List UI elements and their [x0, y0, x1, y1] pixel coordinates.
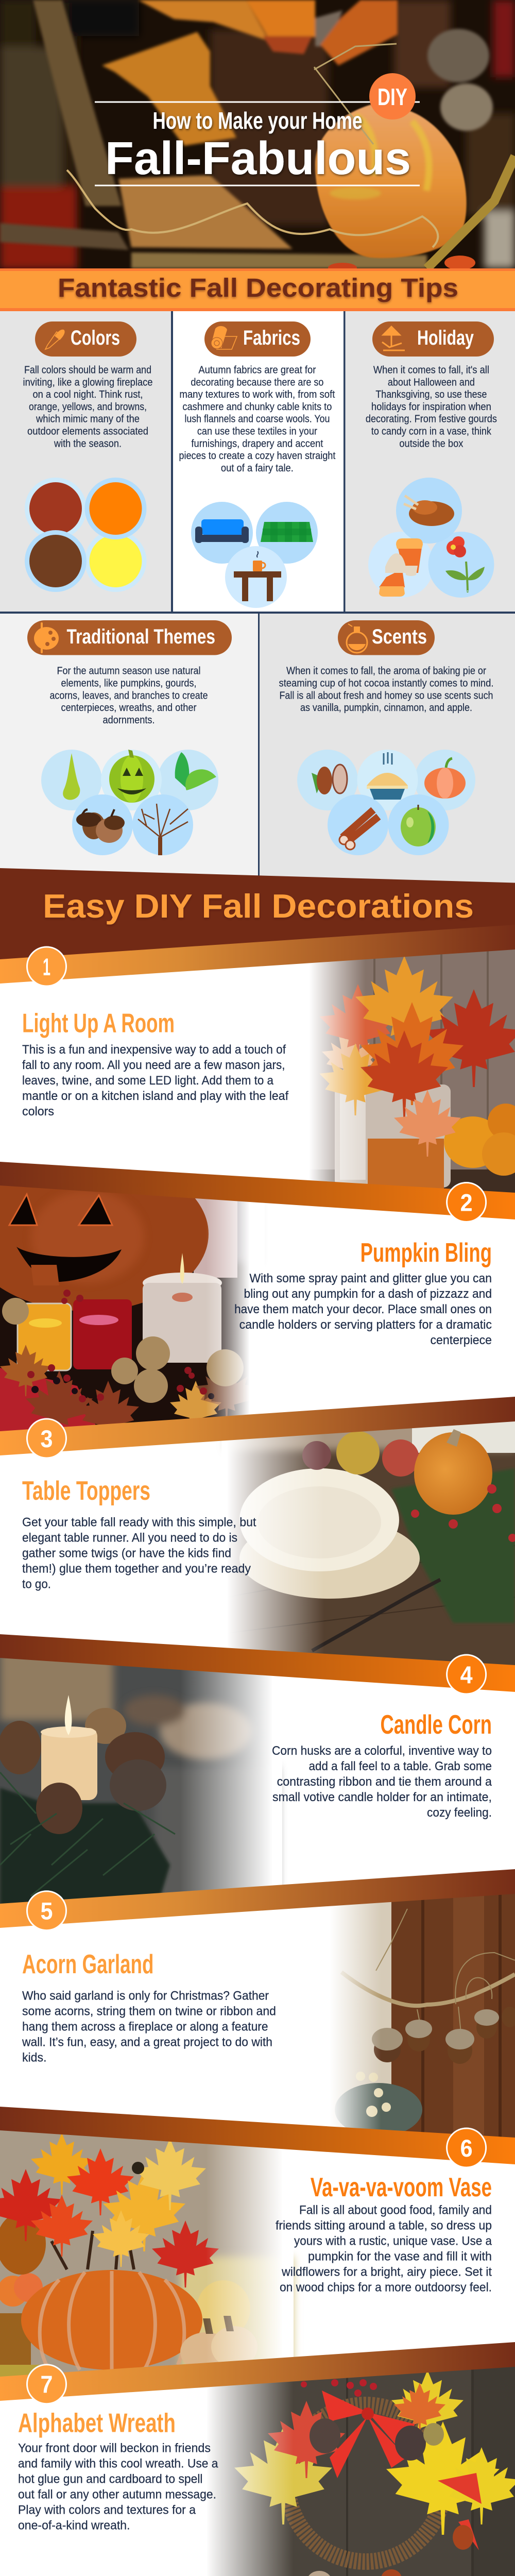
text: light up a room: colors: [22, 1105, 54, 1118]
text: scents: as vanilla, pumpkin, cinnamon, and apple.: [300, 702, 472, 714]
text: colors: inviting, like a glowing fireplace: [23, 377, 152, 388]
text: candle corn: cozy feeling.: [427, 1806, 492, 1820]
text: holiday: about Halloween and: [388, 377, 475, 388]
band and badge 2: 2: [460, 1189, 473, 1216]
text: light up a room: Light Up A Room: [22, 1008, 175, 1038]
text: acorn garland: Acorn Garland: [22, 1950, 153, 1979]
text: table toppers: gather some twigs (or have the kids find: [22, 1547, 231, 1561]
text: alphabet wreath: one-of-a-kind wreath.: [18, 2519, 130, 2533]
text: acorn garland: kids.: [22, 2050, 46, 2065]
hero title block: [95, 73, 420, 187]
text: candle corn: Corn husks are a colorful, inventive way to: [272, 1744, 492, 1758]
text: alphabet wreath: hot glue gun and cardboard to spell: [18, 2472, 203, 2486]
text: holiday: decorating. From festive gourds: [366, 414, 497, 425]
section header: easy DIY fall decorations: [0, 868, 515, 963]
icons: sofa, rug, table: [191, 502, 318, 608]
band and badge 2: [0, 1162, 515, 1222]
text: table toppers: to go.: [22, 1578, 51, 1591]
title line 2: Fall-Fabulous: [105, 133, 411, 184]
DIY badge: [369, 73, 416, 120]
text: colors: with the season.: [54, 438, 122, 449]
text: colors: Fall colors should be warm and: [24, 365, 151, 376]
icon: dropper: [45, 330, 65, 349]
text: holiday: When it comes to fall, it's all: [373, 365, 489, 376]
icons: turkey, candy corn, flower: [368, 478, 494, 598]
text: fabrics: furnishings, drapery and accent: [191, 438, 323, 449]
text: scents: steaming cup of hot cocoa instantly comes to mind.: [279, 678, 493, 689]
text: pumpkin bling: candle holders or serving platters for a dramatic: [239, 1318, 492, 1332]
text: fabrics: many textures to work with, from soft: [179, 389, 335, 400]
text: va-va-va-voom vase: on wood chips for a more outdoorsy feel.: [280, 2281, 492, 2295]
text: holiday: Thanksgiving, so use these: [375, 389, 487, 400]
text: va-va-va-voom vase: yours with a rustic, unique vase. Use a: [294, 2234, 492, 2248]
text: acorn garland: some acorns, string them on twine or ribbon and: [22, 2004, 276, 2019]
text: fabrics: [179, 365, 336, 474]
color swatches: [25, 478, 146, 592]
pill: colors: Colors: [71, 327, 120, 349]
text: alphabet wreath: Play with colors and textures for a: [18, 2503, 196, 2517]
photo 2: glitter pumpkin with candles: [0, 1185, 248, 1431]
text: light up a room: mantle or on a kitchen island and play with the leaf: [22, 1089, 288, 1103]
icons: cocoa, pie, pumpkin, cinnamon, apple: [297, 750, 475, 855]
band and badge 4: [0, 1634, 515, 1694]
band and badge 3: [0, 1397, 515, 1458]
text: va-va-va-voom vase: wildflowers for a bright, airy piece. Set it: [281, 2265, 492, 2279]
photo 4: pillar candle with pine cones: [0, 1658, 284, 1904]
text: fabrics: Autumn fabrics are great for: [198, 365, 316, 376]
text: colors: [23, 365, 152, 449]
band and badge 5: 5: [40, 1897, 53, 1925]
text: colors: outdoor elements associated: [27, 426, 148, 437]
text: scents: [279, 666, 493, 714]
photo 7: autumn wreath on dark wood: [210, 2367, 515, 2576]
text: va-va-va-voom vase: Fall is all about good food, family and: [299, 2204, 492, 2217]
panel: holiday: [345, 311, 515, 612]
text: va-va-va-voom vase: [276, 2173, 492, 2295]
text: light up a room: [22, 1008, 288, 1118]
text: candle corn: add a fall feel to a table. Grab some: [309, 1759, 492, 1773]
text: pumpkin bling: With some spray paint and glitter glue you can: [249, 1272, 492, 1285]
pill: scents: [338, 620, 435, 655]
text: acorn garland: hang them across a fireplace or along a feature: [22, 2020, 268, 2034]
panel: traditional themes: [0, 614, 258, 882]
text: fabrics: lush flannels and coarse wools. You: [184, 414, 330, 425]
text: candle corn: [272, 1710, 492, 1820]
DIY badge: DIY: [377, 83, 407, 110]
text: fabrics: decorating because there are so: [191, 377, 323, 388]
text: va-va-va-voom vase: pumpkin for the vase and fill it with: [308, 2250, 492, 2264]
text: colors: which mimic many of the: [36, 414, 140, 425]
band and badge 1: 1: [43, 953, 50, 980]
pill: colors: [35, 321, 136, 357]
band and badge 4: 4: [460, 1661, 473, 1688]
text: fabrics: cashmere and chunky cable knits to: [182, 401, 332, 413]
band and badge 6: [0, 2107, 515, 2167]
photo 5: acorn garland on wood wall: [335, 1894, 515, 2138]
band and badge 7: [0, 2342, 515, 2404]
text: alphabet wreath: and family with this cool wreath. Use a: [18, 2457, 218, 2471]
text: pumpkin bling: centerpiece: [431, 1333, 492, 1347]
icons: gourd, jack-o-lantern, leaves, acorns, branches: [41, 750, 218, 855]
text: holiday: [366, 365, 497, 449]
text: acorn garland: wall. It’s fun, easy, and a great project to do with: [22, 2035, 272, 2049]
text: traditional themes: For the autumn season use natural: [57, 666, 201, 677]
icon: perfume bottle: [347, 624, 367, 653]
band and badge 7: 7: [40, 2371, 53, 2398]
text: alphabet wreath: Your front door will beckon in friends: [18, 2442, 211, 2455]
text: table toppers: [22, 1476, 256, 1591]
text: colors: on a cool night. Think rust,: [33, 389, 143, 400]
title line 1: How to Make your Home: [152, 107, 363, 134]
pill: traditional themes: Traditional Themes: [67, 625, 215, 648]
section header: easy DIY fall decorations: Easy DIY Fall Decorations: [43, 887, 474, 925]
pill: holiday: Holiday: [417, 327, 474, 349]
text: candle corn: small votive candle holder for an intimate,: [272, 1790, 492, 1804]
text: table toppers: Get your table fall ready with this simple, but: [22, 1516, 256, 1530]
text: pumpkin bling: [234, 1238, 492, 1347]
text: traditional themes: centerpieces, wreaths, and other: [61, 702, 197, 714]
icon: palette: [34, 622, 59, 653]
text: acorn garland: Who said garland is only for Christmas? Gather: [22, 1989, 269, 2003]
text: traditional themes: elements, like pumpkins, gourds,: [61, 678, 197, 689]
pill: fabrics: [204, 321, 311, 357]
panel: colors: [0, 311, 171, 612]
text: va-va-va-voom vase: friends sitting around a table, so dress up: [276, 2219, 492, 2233]
text: traditional themes: acorns, leaves, and branches to create: [49, 690, 208, 701]
text: table toppers: Table Toppers: [22, 1476, 150, 1506]
band and badge 6: 6: [460, 2134, 473, 2162]
photo 6: pumpkin vase with flowers: [0, 2112, 294, 2391]
text: fabrics: out of a fairy tale.: [221, 463, 294, 474]
icon: fabric roll: [211, 326, 237, 349]
text: pumpkin bling: bling out any pumpkin for a dash of pizzazz and: [244, 1287, 492, 1301]
band: fantastic fall decorating tips: [0, 268, 515, 311]
text: light up a room: leaves, twine, and some LED light. Add them to a: [22, 1074, 274, 1088]
hero photo: pumpkin and autumn arrangement: [0, 0, 515, 273]
text: candle corn: contrasting ribbon and tie them around a: [277, 1775, 492, 1789]
text: holiday: holidays for inspiration when: [371, 401, 491, 413]
text: holiday: outside the box: [399, 438, 463, 449]
panel: scents: [260, 614, 515, 884]
text: alphabet wreath: [18, 2409, 218, 2533]
text: light up a room: This is a fun and inexpensive way to add a touch of: [22, 1043, 286, 1057]
text: scents: Fall is all about fresh and homey so use scents such: [279, 690, 493, 701]
text: pumpkin bling: have them match your decor. Place small ones on: [234, 1302, 492, 1316]
text: colors: orange, yellows, and browns,: [29, 401, 147, 413]
text: table toppers: elegant table runner. All you need to do is: [22, 1531, 237, 1545]
panel: fabrics: [173, 311, 344, 612]
pill: traditional themes: [27, 620, 232, 655]
pill: scents: Scents: [372, 625, 427, 648]
icon: beach lounger: [382, 327, 405, 350]
band and badge 3: 3: [40, 1425, 53, 1452]
text: acorn garland: [22, 1950, 276, 2065]
band and badge 1: [0, 925, 515, 986]
panel dividers: [0, 311, 515, 614]
text: alphabet wreath: Alphabet Wreath: [18, 2409, 176, 2438]
text: fabrics: pieces to create a cozy haven straight: [179, 450, 336, 462]
text: traditional themes: [49, 666, 208, 726]
pill: holiday: [372, 321, 494, 357]
text: holiday: to candy corn in a vase, think: [371, 426, 492, 437]
text: light up a room: fall to any room. All you need are a few mason jars,: [22, 1058, 285, 1072]
text: traditional themes: adornments.: [103, 715, 154, 726]
text: scents: When it comes to fall, the aroma of baking pie or: [286, 666, 486, 677]
pill: fabrics: Fabrics: [243, 327, 300, 349]
photo 3: table setting with pumpkin: [220, 1421, 515, 1665]
photo 1: maple leaves in a mason jar: [311, 950, 515, 1193]
band and badge 5: [0, 1869, 515, 1930]
text: fabrics: can use these textiles in your: [197, 426, 317, 437]
text: table toppers: them!) glue them together and you’re ready: [22, 1562, 251, 1576]
text: alphabet wreath: out fall or any other autumn message.: [18, 2488, 216, 2502]
band: fantastic fall decorating tips: Fantastic Fall Decorating Tips: [58, 273, 458, 302]
